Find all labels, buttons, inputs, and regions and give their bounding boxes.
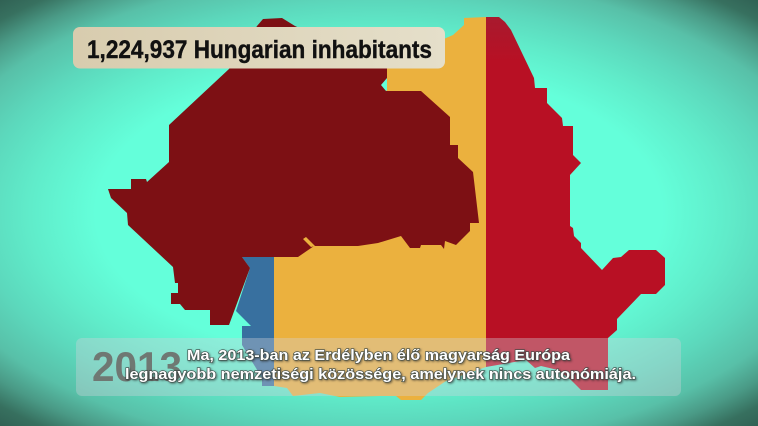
yellow sliver: [303, 237, 315, 247]
callout: Hungarian inhabitants count: [73, 27, 445, 68]
subtitle: Ma, 2013-ban az Erdélyben élő magyarság Európa: [187, 347, 571, 364]
map of Romania by ethnic regions: [108, 17, 665, 400]
region: red area: [486, 17, 665, 390]
subtitle: [125, 347, 636, 383]
subtitle: legnagyobb nemzetiségi közössége, amelynek nincs autonómiája.: [125, 366, 636, 383]
year label: 2013: [92, 343, 182, 390]
region: yellow area: [274, 17, 486, 400]
region: dark red area with Hungarian inhabitants: [108, 18, 479, 325]
callout: Hungarian inhabitants count: 1,224,937 Hungarian inhabitants: [87, 36, 432, 64]
caption panel: [76, 338, 681, 396]
region: blue area: [236, 257, 274, 386]
